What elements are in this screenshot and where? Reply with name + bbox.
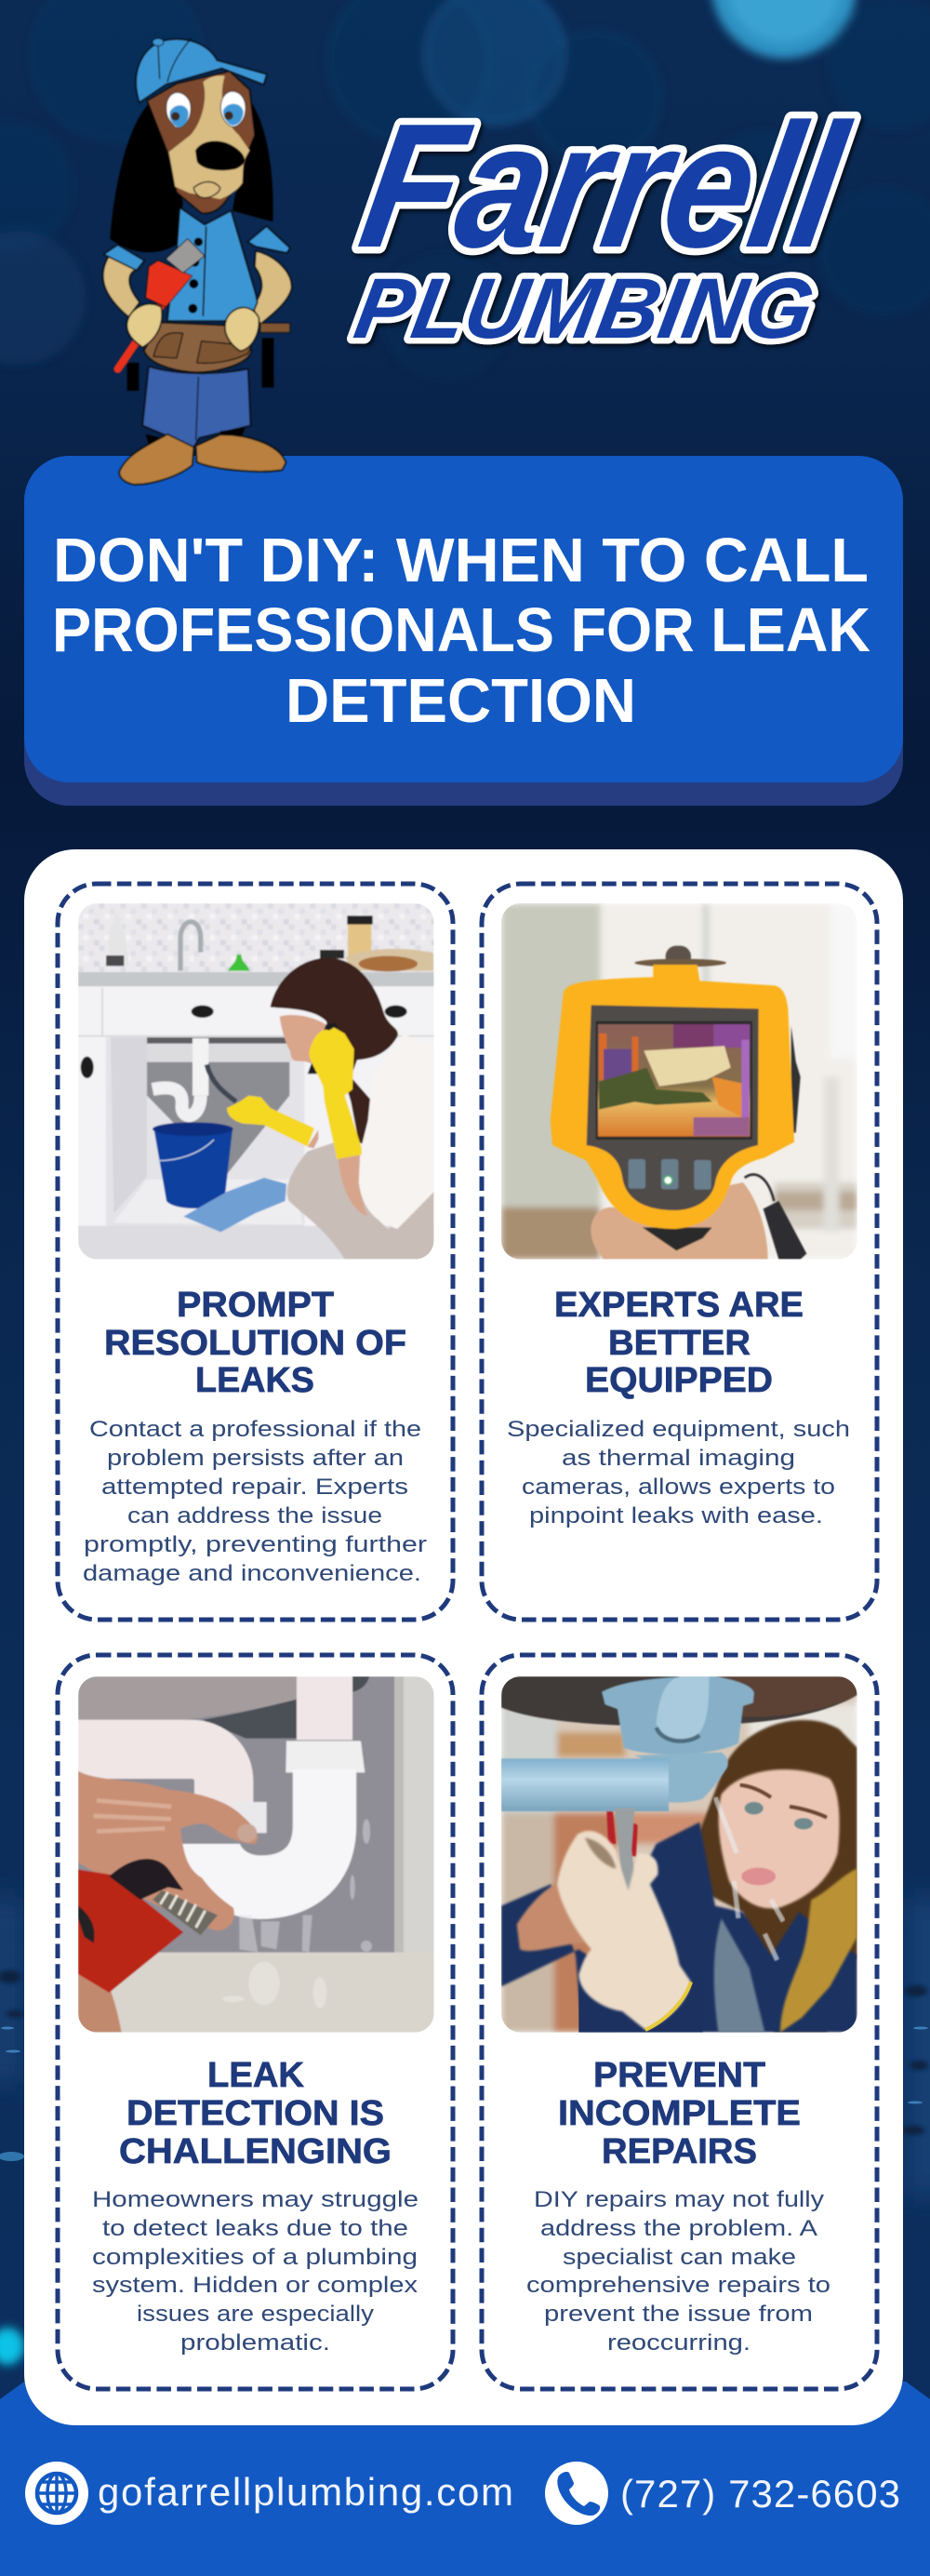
title panel shadow: [24, 493, 903, 806]
body text: promptly, preventing further: [84, 1532, 427, 1557]
heading: EXPERTS ARE: [554, 1286, 804, 1325]
body text: DIY repairs may not fully: [534, 2187, 824, 2212]
body text: Homeowners may struggle: [92, 2187, 418, 2212]
tool belt straps: [127, 338, 273, 391]
body text: [92, 2187, 418, 2356]
icon: phone: [545, 2462, 608, 2525]
heading: REPAIRS: [602, 2132, 757, 2171]
body text: pinpoint leaks with ease.: [529, 1503, 823, 1528]
photo: hand and wrench on leaking pipe: [78, 1676, 434, 2033]
website: gofarrellplumbing.com: [98, 2470, 513, 2514]
body text: Contact a professional if the: [89, 1417, 421, 1442]
body text: to detect leaks due to the: [102, 2216, 408, 2241]
body text: comprehensive repairs to: [526, 2273, 830, 2298]
body text: can address the issue: [127, 1503, 382, 1528]
title: DETECTION: [286, 666, 636, 736]
nose: [195, 140, 245, 170]
heading: EQUIPPED: [585, 1361, 773, 1400]
white content panel: [24, 849, 903, 2425]
phone number: (727) 732-6603: [620, 2472, 900, 2516]
logo: Farrell Plumbing: Farrell: [349, 87, 861, 285]
body text: issues are especially: [137, 2302, 374, 2327]
heading: DETECTION IS: [126, 2094, 384, 2133]
boots: [146, 428, 245, 447]
body text: attempted repair. Experts: [101, 1475, 408, 1500]
card: experts are better equipped: [482, 884, 877, 1620]
heading: BETTER: [608, 1324, 751, 1363]
title: DON'T DIY: WHEN TO CALL: [53, 526, 869, 595]
ears: [110, 102, 273, 252]
heading: PREVENT: [593, 2056, 765, 2095]
photo: woman repairing sink pipe: [501, 1676, 857, 2033]
head: [147, 72, 255, 213]
photo: thermal imaging camera: [501, 903, 857, 1260]
title: [52, 526, 870, 736]
body text: address the problem. A: [540, 2216, 817, 2241]
icon: globe: [25, 2462, 88, 2525]
body text: problem persists after an: [107, 1446, 404, 1471]
arms: [103, 257, 140, 317]
wrench: [118, 300, 165, 369]
heading: CHALLENGING: [119, 2132, 392, 2171]
heading: [558, 2056, 801, 2171]
footer band: [0, 2382, 930, 2576]
heading: [104, 1286, 406, 1400]
body text: problematic.: [180, 2330, 330, 2356]
logo: Farrell Plumbing: [349, 87, 861, 356]
heading: LEAKS: [195, 1361, 314, 1400]
body text: system. Hidden or complex: [92, 2273, 418, 2298]
heading: [119, 2056, 392, 2171]
title panel: [24, 456, 903, 782]
body text: Specialized equipment, such: [507, 1417, 850, 1442]
body text: complexities of a plumbing: [92, 2245, 418, 2270]
pants: [142, 367, 250, 447]
body text: [83, 1417, 427, 1586]
title: PROFESSIONALS FOR LEAK: [52, 595, 870, 665]
heading: LEAK: [207, 2056, 305, 2095]
heading: RESOLUTION OF: [104, 1324, 406, 1363]
heading: [554, 1286, 804, 1400]
card: prevent incomplete repairs: [482, 1655, 877, 2389]
hands: [126, 304, 259, 351]
chin: [193, 181, 220, 198]
heading: INCOMPLETE: [558, 2094, 801, 2133]
heading: PROMPT: [177, 1286, 334, 1325]
body text: cameras, allows experts to: [522, 1475, 835, 1500]
eyes: [166, 91, 246, 127]
body text: damage and inconvenience.: [83, 1561, 421, 1586]
mascot: plumber dog: [103, 38, 291, 485]
body text: as thermal imaging: [562, 1446, 795, 1471]
card: leak detection is challenging: [58, 1655, 453, 2389]
logo: Farrell Plumbing: PLUMBING: [349, 260, 821, 356]
cap: [136, 39, 267, 102]
shirt: [167, 207, 258, 321]
card: prompt resolution of leaks: [58, 884, 453, 1620]
body text: prevent the issue from: [544, 2302, 813, 2327]
body text: reoccurring.: [607, 2330, 751, 2356]
body text: [507, 1417, 850, 1528]
photo: woman on phone under leaking sink: [78, 903, 434, 1260]
belt pouch: [144, 323, 251, 372]
body text: [526, 2187, 830, 2356]
face tan: [169, 75, 249, 199]
body text: specialist can make: [563, 2245, 796, 2270]
